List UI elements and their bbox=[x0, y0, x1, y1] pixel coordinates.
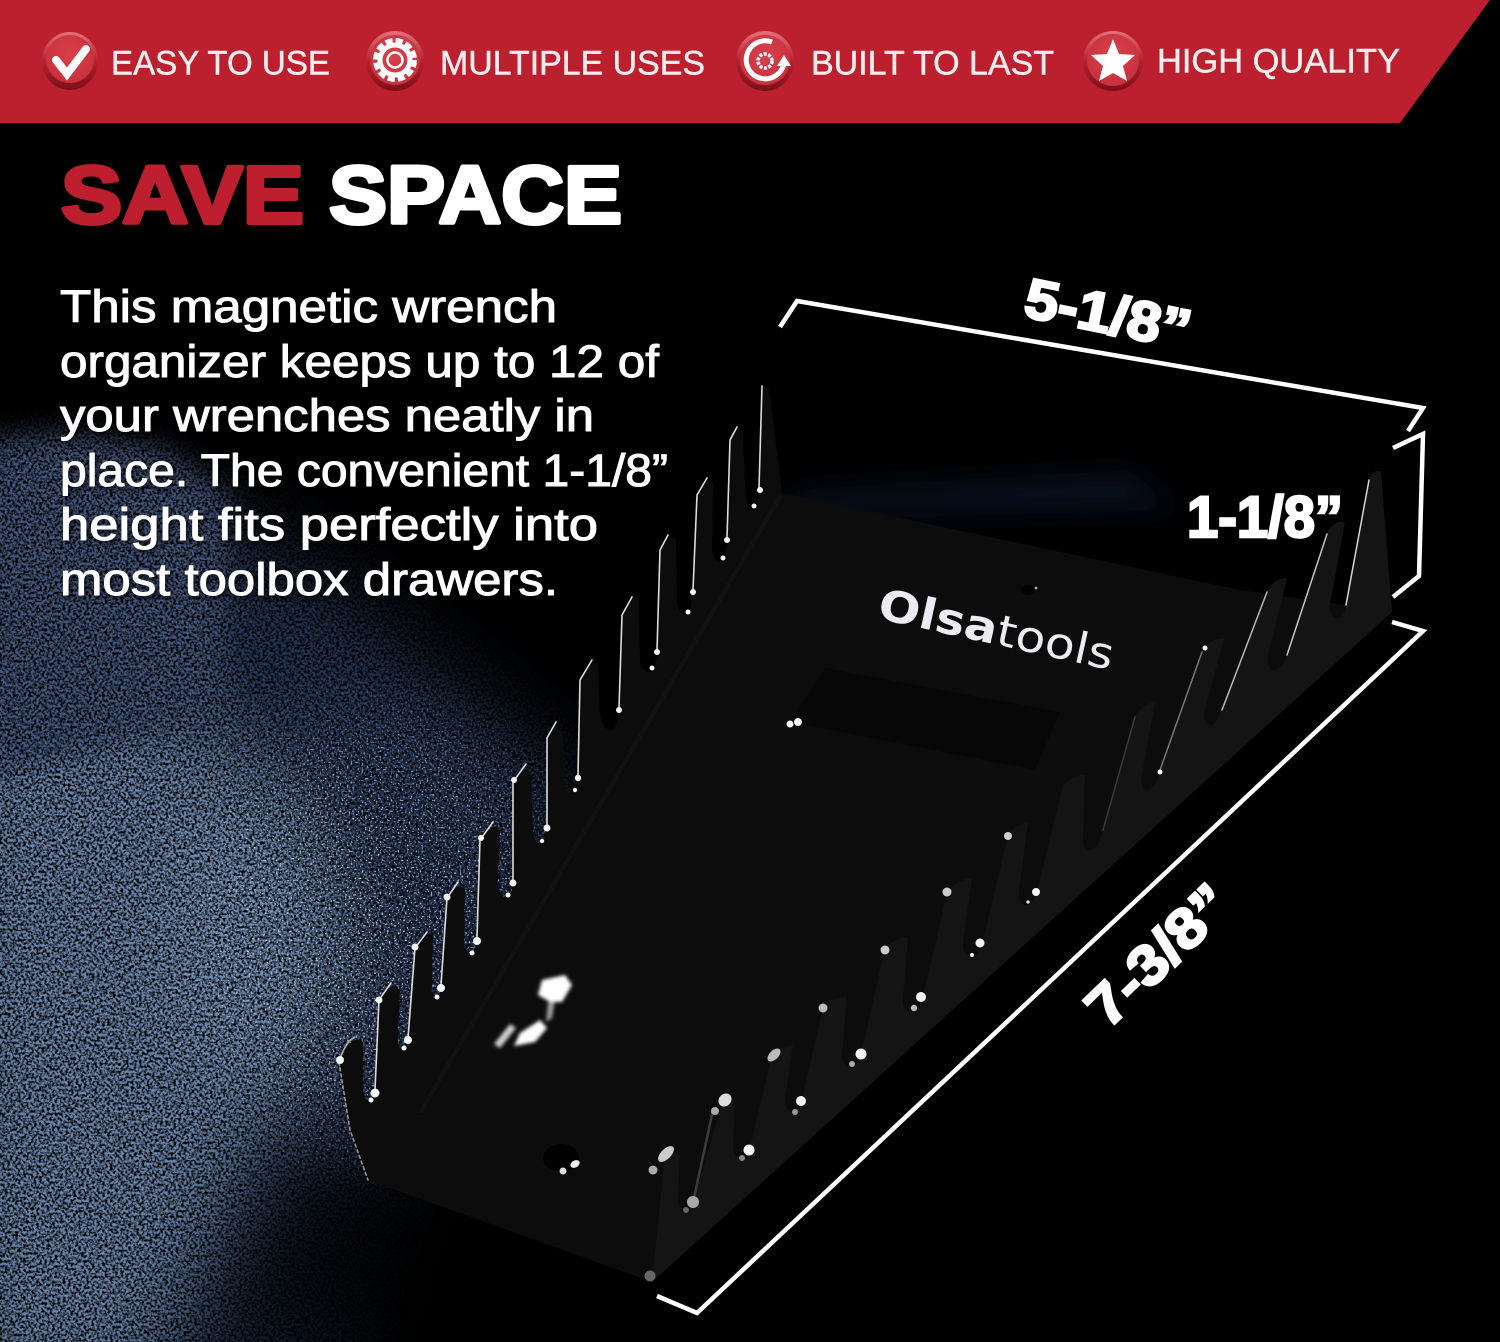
dimension: height 1-1/8 bbox=[1187, 434, 1423, 597]
heading: save space bbox=[61, 150, 622, 241]
badge: built to last bbox=[736, 31, 1054, 91]
icon: gear with cycle arrow bbox=[736, 31, 794, 91]
top banner bbox=[0, 0, 1490, 123]
left comb wall and floor bbox=[339, 385, 1392, 1282]
glare bbox=[494, 975, 572, 1048]
fabric surface bbox=[0, 400, 1180, 1342]
icon: star bbox=[1083, 31, 1143, 91]
bracket: length bbox=[657, 622, 1423, 1313]
label: built to last: BUILT TO LAST bbox=[811, 44, 1054, 82]
heading: save space: SAVE bbox=[61, 150, 304, 241]
bracket: height bbox=[1393, 434, 1423, 597]
body text: place. The convenient 1-1/8” bbox=[60, 445, 668, 496]
banner background bbox=[0, 0, 1490, 123]
label: multiple uses: MULTIPLE USES bbox=[440, 44, 705, 82]
right comb wall bbox=[652, 471, 1392, 1282]
body text bbox=[60, 281, 668, 605]
label: height: 1-1/8” bbox=[1187, 485, 1343, 550]
body text: This magnetic wrench bbox=[60, 281, 557, 332]
body text: most toolbox drawers. bbox=[60, 554, 558, 605]
magnet block bbox=[790, 668, 1060, 770]
heading: save space: SPACE bbox=[329, 150, 622, 241]
body text: organizer keeps up to 12 of bbox=[60, 336, 660, 387]
dimension: width 5-1/8 bbox=[780, 266, 1423, 431]
bracket: width bbox=[780, 301, 1423, 431]
badge: high quality bbox=[1083, 31, 1400, 91]
body text: your wrenches neatly in bbox=[60, 390, 594, 441]
wrench organizer tray bbox=[336, 385, 1392, 1282]
specular dots bbox=[336, 487, 1208, 1282]
dimension: length 7-3/8 bbox=[657, 622, 1423, 1313]
label: easy to use: EASY TO USE bbox=[111, 44, 330, 82]
label: width: 5-1/8” bbox=[1020, 266, 1197, 361]
mounting holes bbox=[543, 585, 1037, 1174]
body text: height fits perfectly into bbox=[60, 499, 598, 550]
badge: easy to use bbox=[42, 32, 330, 90]
icon: gear bbox=[366, 31, 424, 91]
logo: Olsatools: Olsatools bbox=[874, 580, 1119, 681]
highlights on comb edges bbox=[375, 386, 762, 1090]
label: length: 7-3/8” bbox=[1073, 871, 1243, 1039]
icon: check mark bbox=[42, 32, 98, 90]
wall fold line bbox=[420, 493, 782, 1113]
label: high quality: HIGH QUALITY bbox=[1157, 42, 1400, 80]
badge: multiple uses bbox=[366, 31, 705, 91]
